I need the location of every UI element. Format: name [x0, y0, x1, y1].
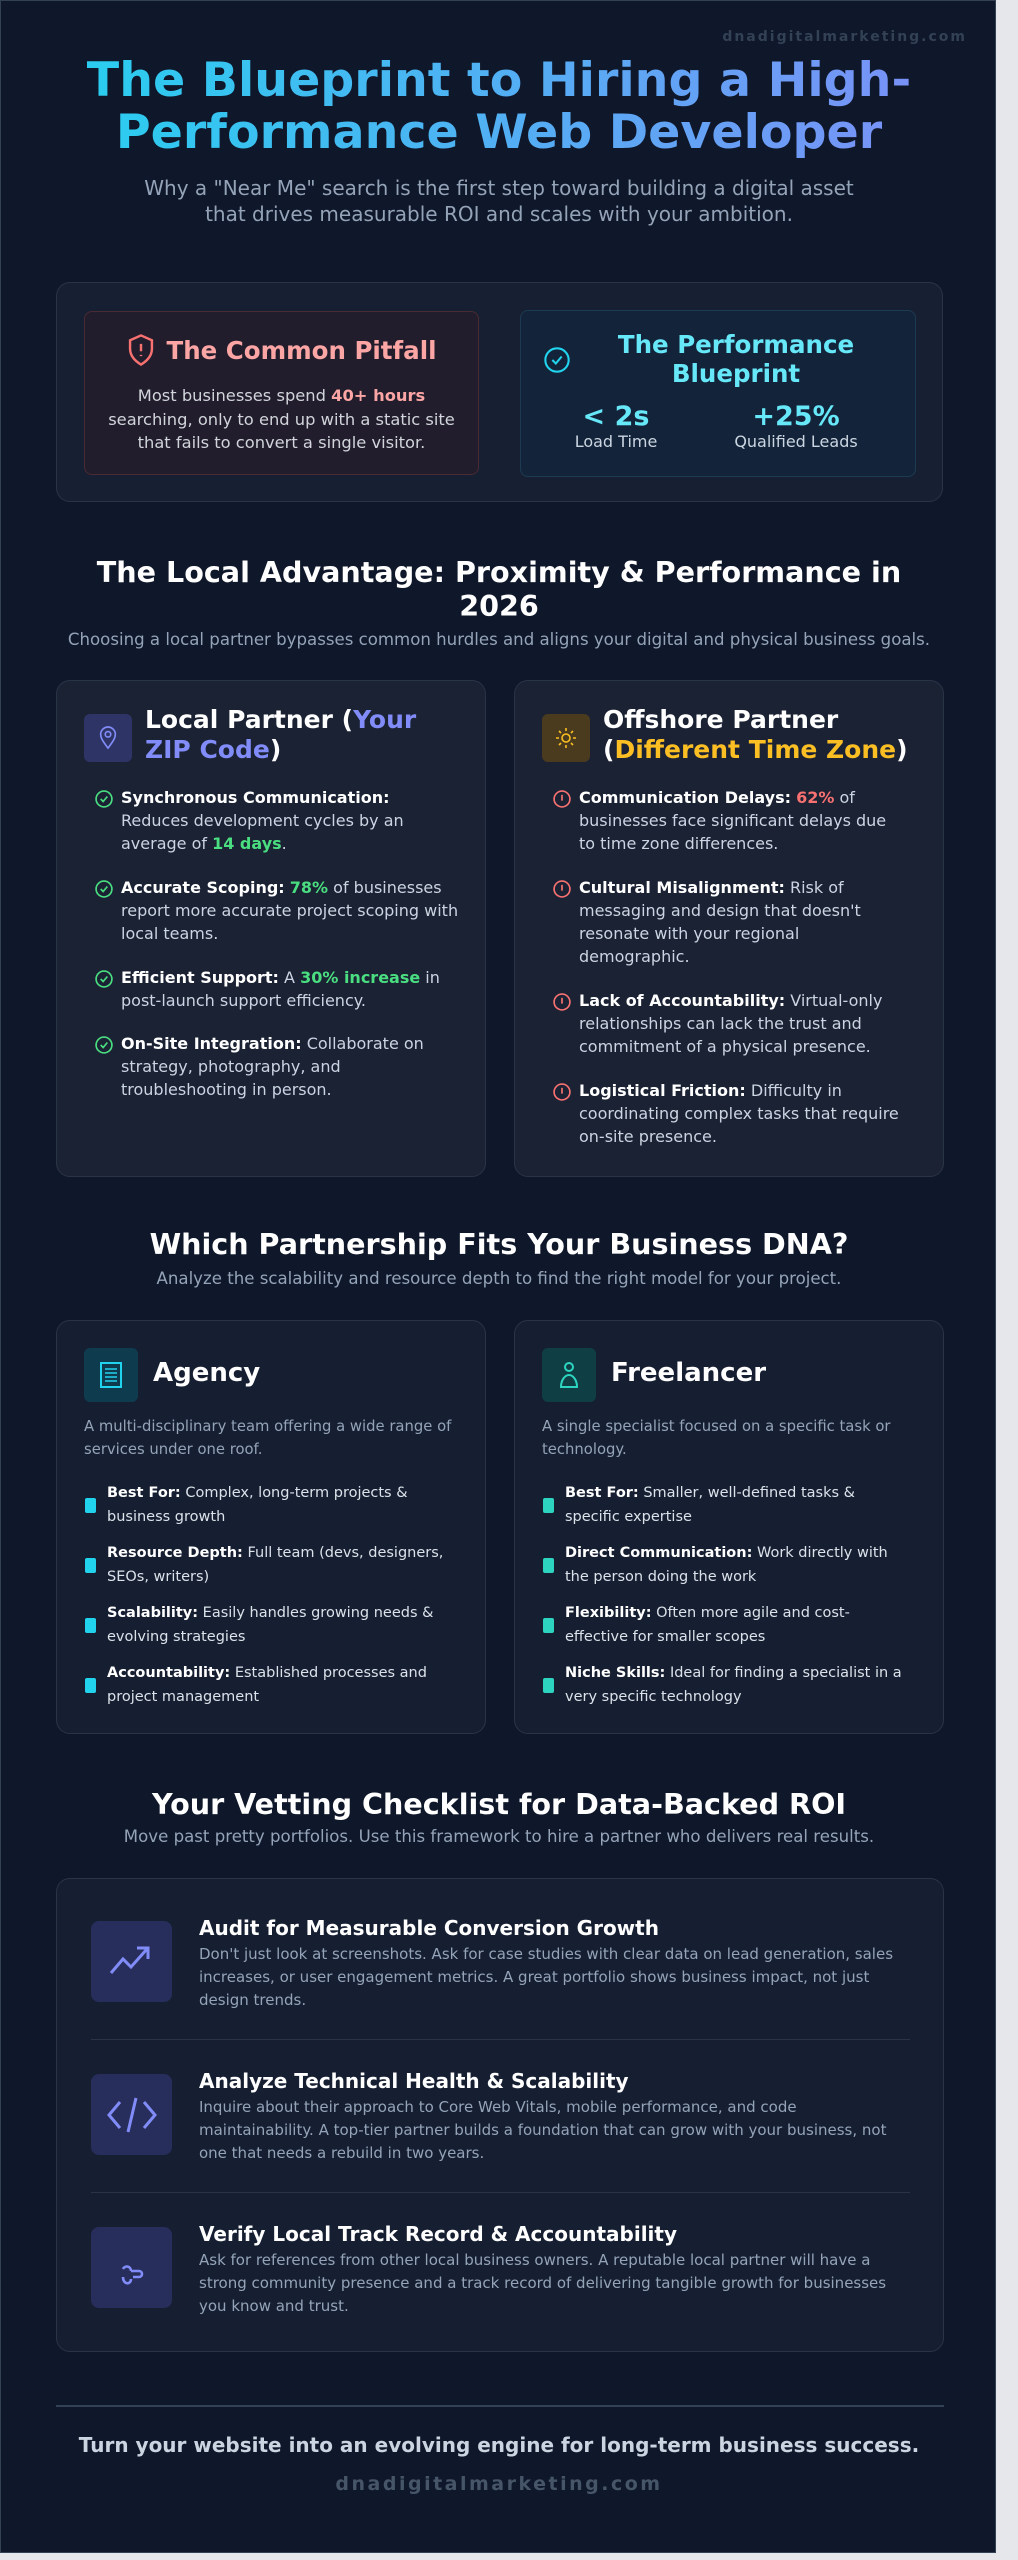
panel: freelancer	[514, 1320, 944, 1734]
text: freelancer description: A single specialist focused on a specific task or technology.	[542, 1418, 890, 1458]
list: freelancer features: the person doing the work	[565, 1569, 756, 1585]
heading: local advantage: The Local Advantage: Proximity & Performance in	[97, 555, 901, 589]
panel: local partner	[56, 680, 486, 1177]
icon: sun	[542, 714, 590, 762]
item: conversion growth	[91, 1916, 893, 2009]
list: local benefits: average of 14 days.	[121, 834, 287, 853]
heading: local partner	[145, 705, 416, 764]
icon: pin	[84, 714, 132, 762]
list: local benefits: Reduces development cycles by an	[121, 811, 404, 830]
icon: check circle	[544, 347, 570, 373]
heading: offshore partner: (Different Time Zone)	[603, 735, 908, 764]
stat: load time	[575, 401, 657, 451]
list: agency features: Best For: Complex, long-term projects & business growth	[107, 1485, 408, 1525]
list: local benefits: Accurate Scoping: 78% of businesses report more accurate project scoping with local teams.	[121, 878, 458, 943]
list: local benefits: Synchronous Communication:	[121, 788, 390, 807]
subtitle	[144, 176, 854, 226]
heading: freelancer: Freelancer	[611, 1358, 766, 1388]
list: offshore drawbacks: resonate with your regional	[579, 924, 799, 943]
title: The Blueprint to Hiring a High-	[87, 53, 911, 108]
footer url: dnadigitalmarketing.com	[335, 2473, 663, 2495]
stat: load time: < 2s	[583, 401, 649, 432]
list: offshore drawbacks: businesses face significant delays due	[579, 811, 886, 830]
text: conversion growth: Audit for Measurable Conversion Growth	[199, 1916, 659, 1940]
subheading: vetting checklist: Move past pretty portfolios. Use this framework to hire a partner who delivers real results.	[124, 1827, 874, 1846]
text: technical health: Inquire about their approach to Core Web Vitals, mobile performance, and code maintainability. A top-tier partner builds a foundation that can grow with your business, not one that needs a rebuild in two years.	[199, 2098, 886, 2162]
item: technical health	[91, 2069, 886, 2162]
heading: agency: Agency	[153, 1358, 260, 1388]
panel: offshore partner	[514, 680, 944, 1177]
list: local benefits: On-Site Integration: Collaborate on strategy, photography, and troubleshooting in person.	[121, 1034, 424, 1099]
list: freelancer features: very specific technology	[565, 1689, 742, 1705]
stat: leads: +25%	[752, 401, 840, 432]
icon: building	[84, 1348, 138, 1402]
panel: performance blueprint	[520, 310, 916, 477]
title	[1, 55, 997, 159]
panel: offshore partner: on-site presence.	[579, 1127, 717, 1146]
list: offshore drawbacks: Lack of Accountability: Virtual-only	[579, 991, 882, 1010]
text: technical health	[199, 2069, 886, 2162]
icon: trend	[91, 1921, 172, 2002]
text: agency description: A multi-disciplinary team offering a wide range of services under one roof.	[84, 1418, 451, 1458]
list: agency features: Resource Depth: Full team (devs, designers, SEOs, writers)	[107, 1545, 443, 1585]
list: freelancer features: Direct Communication: Work directly with	[565, 1545, 888, 1561]
text: pitfall	[108, 386, 455, 452]
text: conversion growth	[199, 1916, 893, 2009]
icon: handshake	[91, 2227, 172, 2308]
text: technical health: Analyze Technical Health & Scalability	[199, 2069, 629, 2093]
heading: blueprint	[618, 330, 854, 388]
heading: business DNA: Which Partnership Fits Your Business DNA?	[150, 1227, 848, 1261]
panel: agency	[56, 1320, 486, 1734]
list: offshore drawbacks: Logistical Friction: Difficulty in	[579, 1081, 842, 1100]
list: offshore drawbacks	[553, 788, 899, 1146]
heading: local advantage	[96, 555, 901, 623]
list: freelancer features: Flexibility: Often more agile and cost-	[565, 1605, 850, 1621]
icon: person	[542, 1348, 596, 1402]
heading: vetting checklist: Your Vetting Checklist for Data-Backed ROI	[152, 1787, 846, 1821]
text: local track record: Verify Local Track Record & Accountability	[199, 2222, 677, 2246]
title: Performance Web Developer	[116, 105, 882, 160]
list: offshore drawbacks: messaging and design that doesn't	[579, 901, 861, 920]
list: offshore drawbacks: relationships can lack the trust and	[579, 1014, 862, 1033]
list: agency features	[85, 1485, 443, 1705]
heading: blueprint: The Performance	[618, 330, 854, 359]
heading: local partner: Local Partner (Your	[145, 705, 416, 734]
list: offshore drawbacks: commitment of a physical presence.	[579, 1037, 871, 1056]
text: conversion growth: Don't just look at screenshots. Ask for case studies with clear data on lead generation, sales increases, or user engagement metrics. A great portfolio shows business impact, not just design trends.	[199, 1945, 893, 2009]
subheading: local advantage: Choosing a local partner bypasses common hurdles and aligns your digital and physical business goals.	[68, 630, 930, 649]
subtitle: that drives measurable ROI and scales with your ambition.	[205, 202, 793, 226]
text: pitfall: searching, only to end up with a static site	[108, 410, 455, 428]
subtitle: Why a "Near Me" search is the first step toward building a digital asset	[144, 176, 854, 200]
list: freelancer features: effective for smaller scopes	[565, 1629, 765, 1645]
list: agency features: Scalability: Easily handles growing needs & evolving strategies	[107, 1605, 433, 1645]
heading: common pitfall: The Common Pitfall	[166, 336, 437, 365]
subheading: business DNA: Analyze the scalability and resource depth to find the right model for your project.	[157, 1269, 841, 1288]
heading: local advantage: 2026	[459, 589, 539, 623]
panel: offshore partner: coordinating complex tasks that require	[579, 1104, 899, 1123]
list: local benefits	[95, 788, 458, 1099]
panel: intro comparison	[56, 282, 943, 502]
panel: common pitfall	[84, 311, 479, 475]
panel: checklist	[56, 1878, 944, 2352]
text: pitfall: that fails to convert a single visitor.	[138, 433, 425, 452]
heading: offshore partner: Offshore Partner	[603, 705, 838, 734]
icon: code	[91, 2074, 172, 2155]
list: offshore drawbacks: Cultural Misalignment: Risk of	[579, 878, 844, 897]
heading: offshore partner	[603, 705, 908, 764]
list: freelancer features: specific expertise	[565, 1509, 692, 1525]
text: local track record: Ask for references from other local business owners. A reputable local partner will have a strong community presence and a track record of delivering tangible growth for businesses you know and trust.	[199, 2251, 886, 2315]
list: local benefits: Efficient Support: A 30% increase in post-launch support efficiency.	[121, 968, 440, 1010]
stat: leads	[734, 401, 858, 451]
text: pitfall: Most businesses spend 40+ hours	[138, 386, 425, 405]
stat: load time: Load Time	[575, 432, 657, 451]
list: freelancer features: Best For: Smaller, well-defined tasks &	[565, 1485, 855, 1501]
item: local track record	[91, 2222, 886, 2315]
list: freelancer features	[543, 1485, 902, 1705]
list: freelancer features: Niche Skills: Ideal for finding a specialist in a	[565, 1665, 902, 1681]
heading: blueprint: Blueprint	[672, 359, 800, 388]
list: offshore drawbacks: to time zone differences.	[579, 834, 778, 853]
watermark: dnadigitalmarketing.com	[722, 29, 967, 45]
heading: local partner: ZIP Code)	[145, 735, 281, 764]
list: agency features: Accountability: Established processes and project management	[107, 1665, 427, 1705]
text: local track record	[199, 2222, 886, 2315]
stat: leads: Qualified Leads	[734, 432, 858, 451]
list: offshore drawbacks: Communication Delays: 62% of	[579, 788, 855, 807]
list: offshore drawbacks: demographic.	[579, 947, 690, 966]
footer tagline: Turn your website into an evolving engine for long-term business success.	[79, 2433, 919, 2457]
